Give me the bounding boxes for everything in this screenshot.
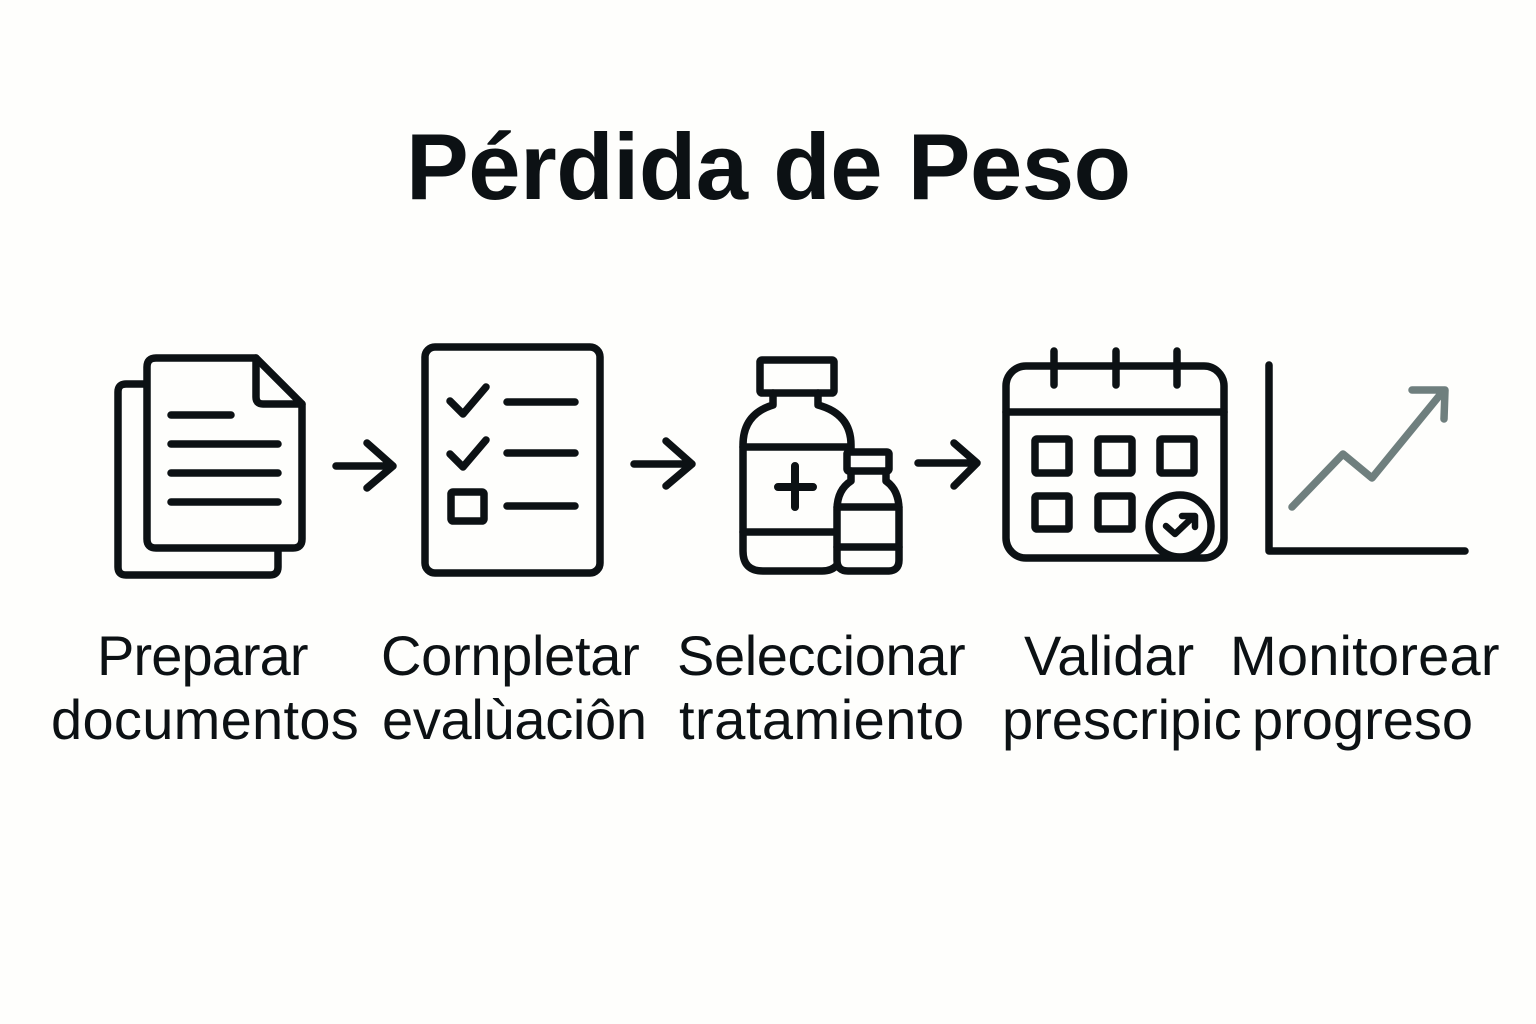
icon: checklist <box>425 347 600 573</box>
icon: calendar <box>1006 351 1224 558</box>
step 2 label: evalùaciôn <box>382 688 647 751</box>
step 3 label <box>677 624 965 751</box>
title: Pérdida de Peso <box>406 114 1131 219</box>
step 2 label <box>381 624 647 751</box>
arrow 1 <box>336 443 393 488</box>
step 3 label: Seleccionar <box>677 624 965 687</box>
step 5 label: Monitorear <box>1230 624 1500 687</box>
step 4 label: prescripic <box>1002 688 1242 751</box>
step 4 label: Validar <box>1024 624 1194 687</box>
arrow 2 <box>634 441 692 486</box>
icon: medicine bottles <box>743 360 899 571</box>
icon: documents <box>118 358 302 575</box>
step 5 label <box>1230 624 1500 751</box>
step 1 label: documentos <box>51 688 359 751</box>
arrow 3 <box>918 443 977 486</box>
icon: progress chart <box>1269 365 1465 551</box>
step 5 label: progreso <box>1252 688 1473 751</box>
step 1 label <box>51 624 359 751</box>
step 4 label <box>1002 624 1242 751</box>
step 1 label: Preparar <box>97 624 308 687</box>
step 3 label: tratamiento <box>679 688 965 751</box>
step 2 label: Cornpletar <box>381 624 639 687</box>
